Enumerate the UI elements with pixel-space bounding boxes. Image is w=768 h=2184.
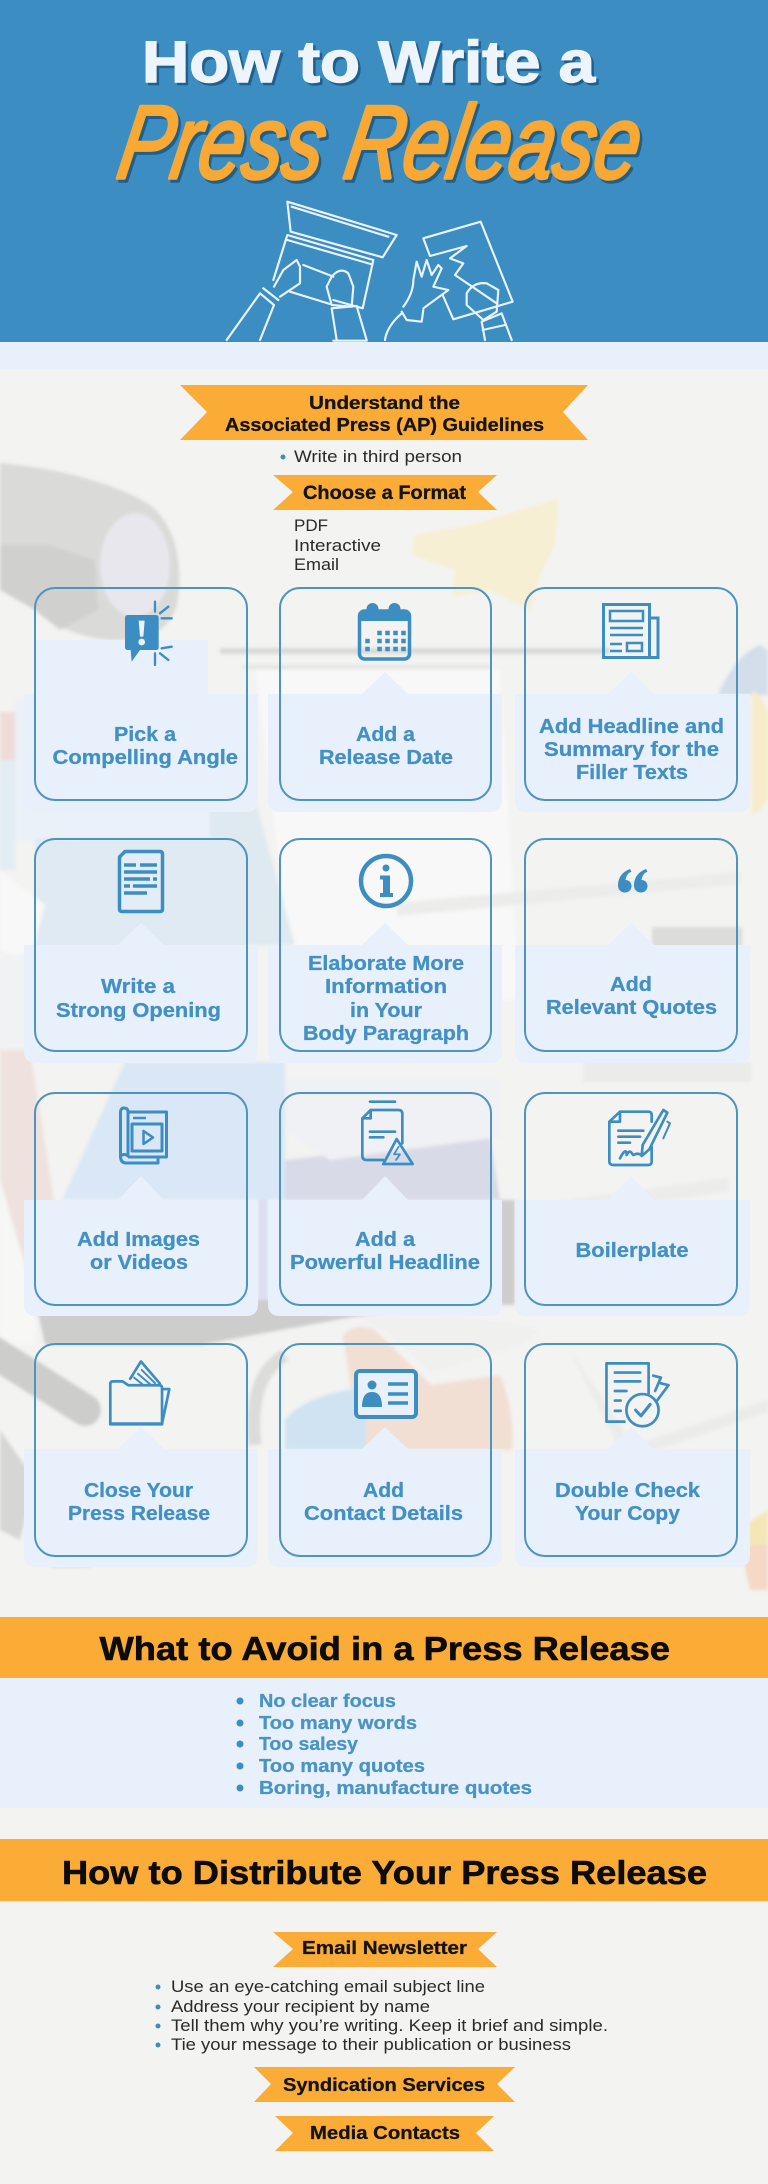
text: or Videos bbox=[90, 1252, 188, 1274]
text: Add Headline and bbox=[539, 716, 724, 738]
avoid list bbox=[236, 1690, 532, 1798]
format list bbox=[294, 516, 381, 574]
text bbox=[319, 724, 453, 769]
text: Powerful Headline bbox=[290, 1252, 480, 1274]
text: Filler Texts bbox=[576, 762, 688, 784]
title: How to Write a: How to Write a bbox=[142, 30, 596, 95]
avoid list: Boring, manufacture quotes bbox=[259, 1777, 532, 1798]
text: Your Copy bbox=[575, 1503, 681, 1525]
text: Add bbox=[363, 1480, 404, 1502]
card: Double Check Your Copy bbox=[525, 1344, 737, 1556]
icon: video book bbox=[120, 1108, 166, 1163]
format list: PDF bbox=[294, 516, 328, 535]
illustration: hands on laptop and paper bbox=[227, 202, 513, 341]
text bbox=[304, 1480, 463, 1525]
panel: card underlays bbox=[24, 640, 750, 1567]
icon: calendar bbox=[358, 603, 411, 659]
text: Contact Details bbox=[304, 1503, 463, 1525]
text bbox=[555, 1480, 701, 1525]
text: Information bbox=[325, 976, 447, 998]
icon: document bbox=[120, 852, 162, 912]
text: Summary for the bbox=[544, 739, 719, 761]
card: Add Images or Videos bbox=[35, 1093, 247, 1305]
format list: Email bbox=[294, 555, 339, 574]
card: Add a Powerful Headline bbox=[280, 1093, 491, 1305]
text bbox=[290, 1229, 480, 1274]
icon: information bbox=[361, 856, 411, 906]
icon: newspaper bbox=[604, 604, 658, 658]
email tips list: Tell them why you’re writing. Keep it brief and simple. bbox=[171, 2016, 608, 2035]
ribbon: Media Contacts: Media Contacts bbox=[310, 2123, 460, 2143]
text: Write a bbox=[101, 976, 176, 998]
text: Body Paragraph bbox=[303, 1023, 469, 1045]
icon: folder with papers bbox=[110, 1361, 169, 1424]
text: Add bbox=[610, 974, 652, 996]
icon: alert speech bubble bbox=[125, 602, 172, 665]
icon: checklist with check badge bbox=[606, 1363, 669, 1426]
text: Press Release bbox=[68, 1503, 210, 1525]
card: Close Your Press Release bbox=[35, 1344, 247, 1556]
card: Add a Release Date bbox=[280, 588, 491, 800]
ribbon: Understand the AP Guidelines: Associated Press (AP) Guidelines bbox=[225, 415, 544, 435]
text bbox=[56, 976, 221, 1022]
text: Release Date bbox=[319, 747, 453, 769]
card: Pick a Compelling Angle bbox=[35, 588, 247, 800]
email tips list: Use an eye-catching email subject line bbox=[171, 1977, 485, 1996]
ribbon: Syndication Services: Syndication Services bbox=[283, 2075, 485, 2095]
bullet: write in third person: Write in third person bbox=[294, 447, 462, 466]
text: Compelling Angle bbox=[52, 747, 238, 769]
title: How to Write a: How to Write a bbox=[144, 32, 598, 98]
text bbox=[68, 1480, 210, 1525]
card: Add Relevant Quotes bbox=[525, 839, 737, 1051]
section: What to Avoid panel bbox=[0, 1617, 768, 1808]
text bbox=[77, 1229, 200, 1274]
text: Add Images bbox=[77, 1229, 200, 1251]
text bbox=[539, 716, 724, 784]
text: Double Check bbox=[555, 1480, 701, 1502]
ribbon: Media Contacts bbox=[275, 2116, 494, 2151]
email tips list: Address your recipient by name bbox=[171, 1997, 430, 2016]
text: Add a bbox=[355, 1229, 416, 1251]
text bbox=[303, 953, 469, 1045]
text: Add a bbox=[356, 724, 416, 746]
text: Relevant Quotes bbox=[546, 997, 717, 1019]
ribbon: Syndication Services bbox=[254, 2067, 515, 2102]
avoid list: Too many words bbox=[259, 1712, 417, 1733]
text: Close Your bbox=[84, 1480, 193, 1502]
ribbon: Choose a Format bbox=[273, 475, 497, 510]
text: Strong Opening bbox=[56, 1000, 221, 1022]
avoid list: No clear focus bbox=[259, 1690, 396, 1711]
email tips list: Tie your message to their publication or business bbox=[171, 2035, 571, 2054]
icon: contract and pen bbox=[609, 1110, 670, 1165]
text: Pick a bbox=[114, 724, 177, 746]
avoid list: Too salesy bbox=[259, 1733, 359, 1754]
format list: Interactive bbox=[294, 536, 381, 555]
card: Add Headline and Summary bbox=[525, 588, 737, 800]
icon: quotation marks bbox=[618, 869, 648, 892]
card: Add Contact Details bbox=[280, 1344, 491, 1556]
ribbon: Choose a Format: Choose a Format bbox=[303, 483, 467, 504]
text: Boilerplate bbox=[576, 1240, 688, 1262]
ribbon: Understand the AP Guidelines bbox=[180, 385, 588, 440]
email tips list bbox=[156, 1977, 608, 2054]
ribbon: Understand the AP Guidelines: Understand the bbox=[309, 393, 460, 413]
text: Elaborate More bbox=[308, 953, 464, 975]
text bbox=[52, 724, 238, 769]
heading: What to Avoid: What to Avoid in a Press Release bbox=[100, 1630, 670, 1667]
card: Elaborate More Information bbox=[280, 839, 491, 1051]
card: Write a Strong Opening bbox=[35, 839, 247, 1051]
text: in Your bbox=[350, 1000, 422, 1022]
avoid list: Too many quotes bbox=[259, 1755, 425, 1776]
heading: How to Distribute: How to Distribute Your Press Release bbox=[62, 1854, 707, 1891]
header band bbox=[0, 0, 768, 369]
icon: contact card bbox=[356, 1371, 416, 1417]
card: Boilerplate bbox=[525, 1093, 737, 1305]
heading: What to Avoid bbox=[0, 1617, 768, 1678]
ribbon: Email Newsletter bbox=[273, 1932, 497, 1967]
ribbon: Email Newsletter: Email Newsletter bbox=[302, 1938, 467, 1958]
icon: document with warning bbox=[362, 1102, 413, 1164]
text bbox=[546, 974, 717, 1019]
heading: How to Distribute bbox=[0, 1839, 768, 1901]
